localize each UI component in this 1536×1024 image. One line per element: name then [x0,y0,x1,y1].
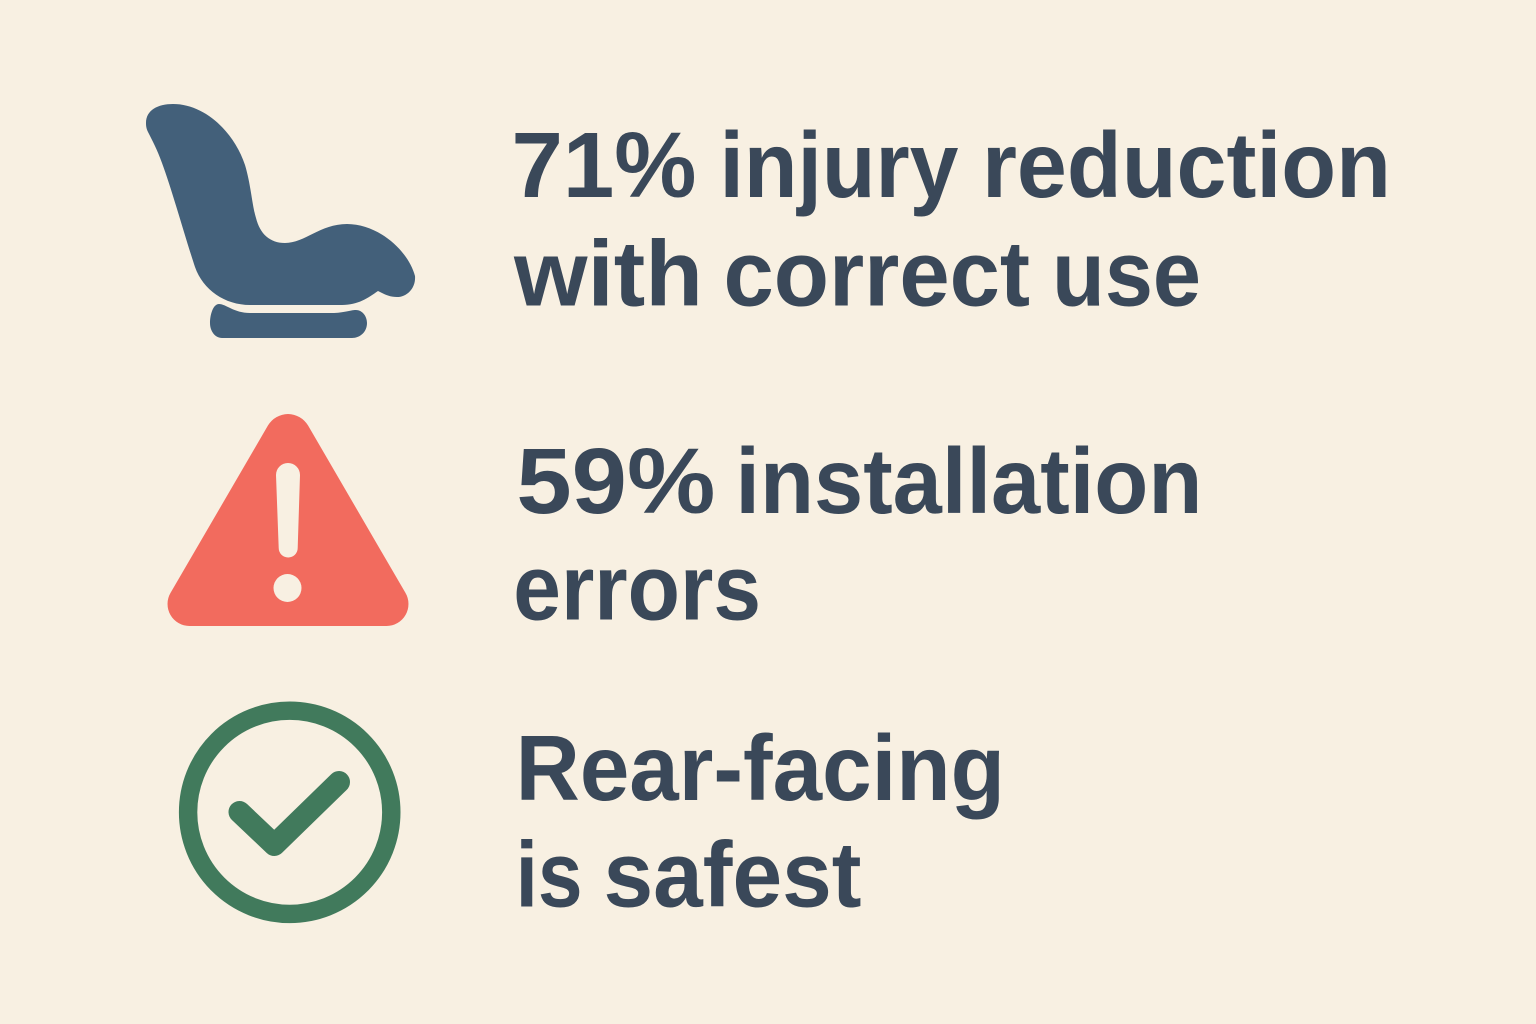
heading: injury reduction: correct [724,222,1030,326]
heading: rear-facing: Rear-facing [516,716,1005,820]
heading: installation errors: errors [513,536,761,640]
icon: check mark circle [188,711,391,914]
heading: injury reduction: with [513,222,703,326]
heading: installation errors: 59% [516,429,715,533]
heading: installation errors: installation [735,429,1202,533]
heading: rear-facing: safest [604,822,862,926]
heading: rear-facing: is [516,822,583,926]
heading: injury reduction: use [1052,222,1201,326]
heading: installation errors [513,429,1202,640]
heading: rear-facing [516,716,1005,926]
heading: injury reduction: injury [720,113,959,217]
heading: injury reduction: reduction [982,113,1391,217]
icon: car seat [146,104,415,338]
icon: warning triangle [168,414,408,626]
heading: injury reduction [512,113,1391,326]
heading: injury reduction: 71% [512,113,696,217]
